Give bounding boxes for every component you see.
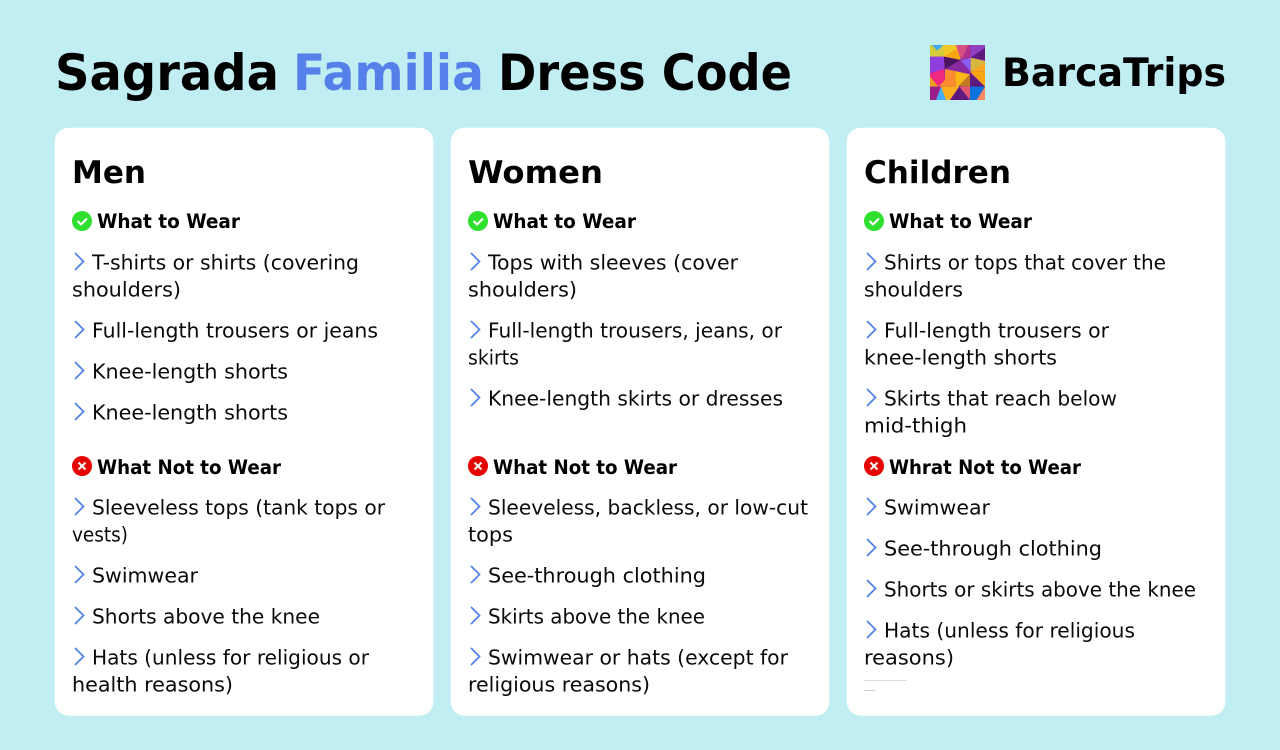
what to wear: What to Wear bbox=[493, 210, 636, 233]
list item: shoulders bbox=[864, 277, 963, 301]
list item: T-shirts or shirts (covering bbox=[91, 250, 359, 274]
list item: shoulders) bbox=[72, 277, 181, 301]
list item: health reasons) bbox=[72, 672, 233, 696]
list item: Skirts above the knee bbox=[488, 604, 705, 628]
heading: women: Women bbox=[468, 155, 603, 191]
title: Dress Code bbox=[498, 44, 792, 102]
list item: Skirts that reach below bbox=[884, 386, 1117, 410]
list item bbox=[468, 318, 783, 369]
list item bbox=[864, 386, 1117, 437]
list item: Hats (unless for religious bbox=[884, 618, 1135, 642]
heading: men: Men bbox=[72, 155, 146, 191]
list item: tops bbox=[468, 522, 513, 546]
what to wear: What to Wear bbox=[889, 210, 1032, 233]
icon: BarcaTrips logo bbox=[930, 45, 985, 100]
list item: Full-length trousers or bbox=[884, 318, 1110, 342]
list item: See-through clothing bbox=[884, 536, 1102, 560]
list item bbox=[468, 495, 808, 546]
what not to wear: Whrat Not to Wear bbox=[889, 456, 1081, 479]
panel: women bbox=[451, 128, 829, 716]
list item: shoulders) bbox=[468, 277, 577, 301]
what to wear: What to Wear bbox=[97, 210, 240, 233]
list item bbox=[468, 250, 739, 301]
list item: Sleeveless, backless, or low-cut bbox=[488, 495, 808, 519]
list item: Swimwear or hats (except for bbox=[488, 645, 789, 669]
list item: knee-length shorts bbox=[864, 345, 1057, 369]
list item: vests) bbox=[72, 522, 128, 546]
list item: Knee-length shorts bbox=[92, 359, 288, 383]
panel: children bbox=[847, 128, 1225, 716]
list item: Hats (unless for religious or bbox=[92, 645, 370, 669]
what not to wear: What Not to Wear bbox=[493, 456, 677, 479]
title: Familia bbox=[293, 44, 484, 102]
list item: skirts bbox=[468, 345, 519, 369]
list item: Swimwear bbox=[92, 563, 199, 587]
list item bbox=[864, 318, 1110, 369]
list item: See-through clothing bbox=[488, 563, 706, 587]
list item: Full-length trousers or jeans bbox=[92, 318, 378, 342]
heading: children: Children bbox=[864, 155, 1011, 191]
title: Sagrada bbox=[55, 44, 279, 102]
list item: Knee-length shorts bbox=[92, 400, 288, 424]
list item: Knee-length skirts or dresses bbox=[488, 386, 783, 410]
list item: mid-thigh bbox=[864, 413, 967, 437]
list item bbox=[72, 250, 359, 301]
what not to wear: What Not to Wear bbox=[97, 456, 281, 479]
list item: Full-length trousers, jeans, or bbox=[488, 318, 783, 342]
list item: religious reasons) bbox=[468, 672, 650, 696]
list item bbox=[72, 495, 386, 546]
list item: Shirts or tops that cover the bbox=[884, 250, 1166, 274]
list item: Tops with sleeves (cover bbox=[487, 250, 739, 274]
logo wordmark: BarcaTrips bbox=[1002, 51, 1226, 96]
list item: Shorts above the knee bbox=[92, 604, 320, 628]
list item bbox=[72, 645, 370, 696]
list item: Sleeveless tops (tank tops or bbox=[92, 495, 386, 519]
list item: Shorts or skirts above the knee bbox=[884, 577, 1196, 601]
list item bbox=[864, 250, 1166, 301]
list item: Swimwear bbox=[884, 495, 991, 519]
panel: men bbox=[55, 128, 433, 716]
list item: reasons) bbox=[864, 645, 954, 669]
list item bbox=[864, 618, 1135, 669]
list item bbox=[468, 645, 789, 696]
